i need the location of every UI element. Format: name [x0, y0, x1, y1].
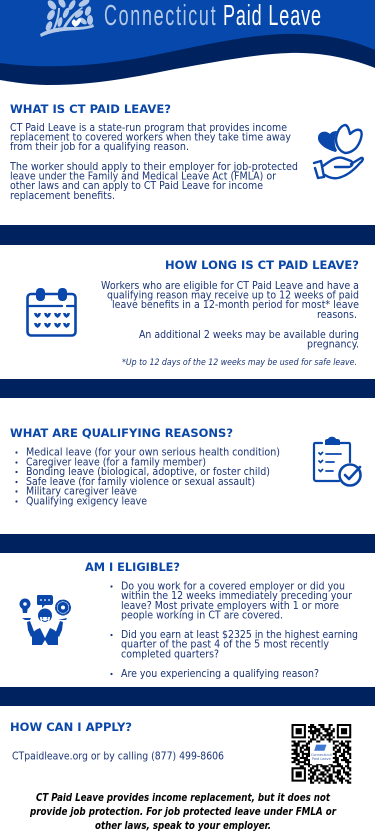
bullet list: Military caregiver leave	[26, 486, 137, 498]
section: how can I apply	[10, 720, 351, 832]
contact line: CTpaidleave.org or by calling (877) 499-8606	[12, 752, 224, 762]
eligibility questions: completed quarters?	[121, 650, 219, 660]
QR code	[292, 725, 351, 783]
footnote: *Up to 12 days of the 12 weeks may be used for safe leave.	[122, 357, 357, 367]
eligibility questions	[110, 582, 358, 680]
body text	[9, 123, 298, 202]
divider band 2	[0, 379, 375, 398]
logo: tree with leaves	[40, 0, 94, 37]
QR centre logo: Paid Leave	[312, 757, 331, 761]
eligibility questions: Are you experiencing a qualifying reason?	[121, 669, 319, 680]
header banner	[0, 0, 375, 85]
body text: other laws and can apply to CT Paid Leave for income	[10, 181, 263, 192]
body text: pregnancy.	[307, 340, 359, 350]
divider band 3	[0, 534, 375, 553]
body text: CT Paid Leave is a state-run program that provides income	[10, 123, 287, 134]
icon: hearts in hand	[314, 125, 363, 178]
logo text: Connecticut	[104, 0, 216, 32]
heading: AM I ELIGIBLE?	[85, 560, 180, 574]
body text	[101, 281, 359, 350]
heading: HOW CAN I APPLY?	[10, 720, 132, 734]
QR centre logo: Connecticut	[311, 753, 332, 757]
divider band 1	[0, 225, 375, 245]
section: how long is CT Paid Leave	[28, 258, 359, 367]
logo: white heart	[72, 18, 81, 27]
eligibility questions: Do you work for a covered employer or did you	[121, 582, 345, 592]
eligibility questions: Did you earn at least $2325 in the highest earning	[121, 630, 358, 641]
header banner: Paid Leave	[223, 0, 321, 32]
body text: reasons.	[317, 310, 357, 321]
section: what is CT Paid Leave	[9, 102, 363, 202]
bullet list: Bonding leave (biological, adoptive, or foster child)	[26, 467, 270, 478]
eligibility questions: leave? Most private employers with 1 or more	[121, 601, 339, 612]
eligibility questions: quarter of the past 4 of the 5 most recently	[121, 640, 329, 650]
icon: person with ideas	[20, 595, 70, 645]
QR centre logo	[310, 743, 333, 764]
heading: WHAT IS CT PAID LEAVE?	[10, 102, 171, 116]
icon: calendar	[28, 288, 76, 336]
body text: from their job for a qualifying reason.	[10, 142, 189, 153]
bullet list: Safe leave (for family violence or sexual assault)	[26, 477, 255, 488]
eligibility questions: people working in CT are covered.	[121, 610, 283, 622]
body text: leave under the Family and Medical Leave Act (FMLA) or	[10, 172, 277, 182]
bullet list: Medical leave (for your own serious health condition)	[26, 448, 280, 458]
body text: leave benefits in a 12-month period for most* leave	[112, 300, 359, 311]
section: am I eligible	[20, 560, 358, 680]
body text: Workers who are eligible for CT Paid Leave and have a	[101, 281, 359, 292]
heading: HOW LONG IS CT PAID LEAVE?	[165, 258, 359, 272]
heading: WHAT ARE QUALIFYING REASONS?	[10, 426, 233, 440]
body text: qualifying reason may receive up to 12 weeks of paid	[107, 290, 359, 302]
eligibility questions: within the 12 weeks immediately preceding your	[121, 591, 353, 602]
bullet list: Qualifying exigency leave	[26, 496, 147, 508]
body text: An additional 2 weeks may be available during	[139, 330, 359, 341]
divider band 4	[0, 687, 375, 706]
body text: The worker should apply to their employer for job-protected	[9, 162, 298, 173]
body text: replacement to covered workers when they take time away	[10, 132, 291, 144]
wave: navy	[0, 30, 375, 85]
bullet list	[15, 448, 280, 508]
section: what are qualifying reasons	[10, 426, 360, 508]
body text: replacement benefits.	[10, 191, 115, 202]
wave: blue	[0, 0, 375, 66]
closing statement: other laws, speak to your employer.	[95, 819, 271, 832]
bullet list: Caregiver leave (for a family member)	[26, 458, 206, 468]
icon: clipboard with check	[314, 437, 360, 486]
closing statement	[29, 791, 337, 832]
